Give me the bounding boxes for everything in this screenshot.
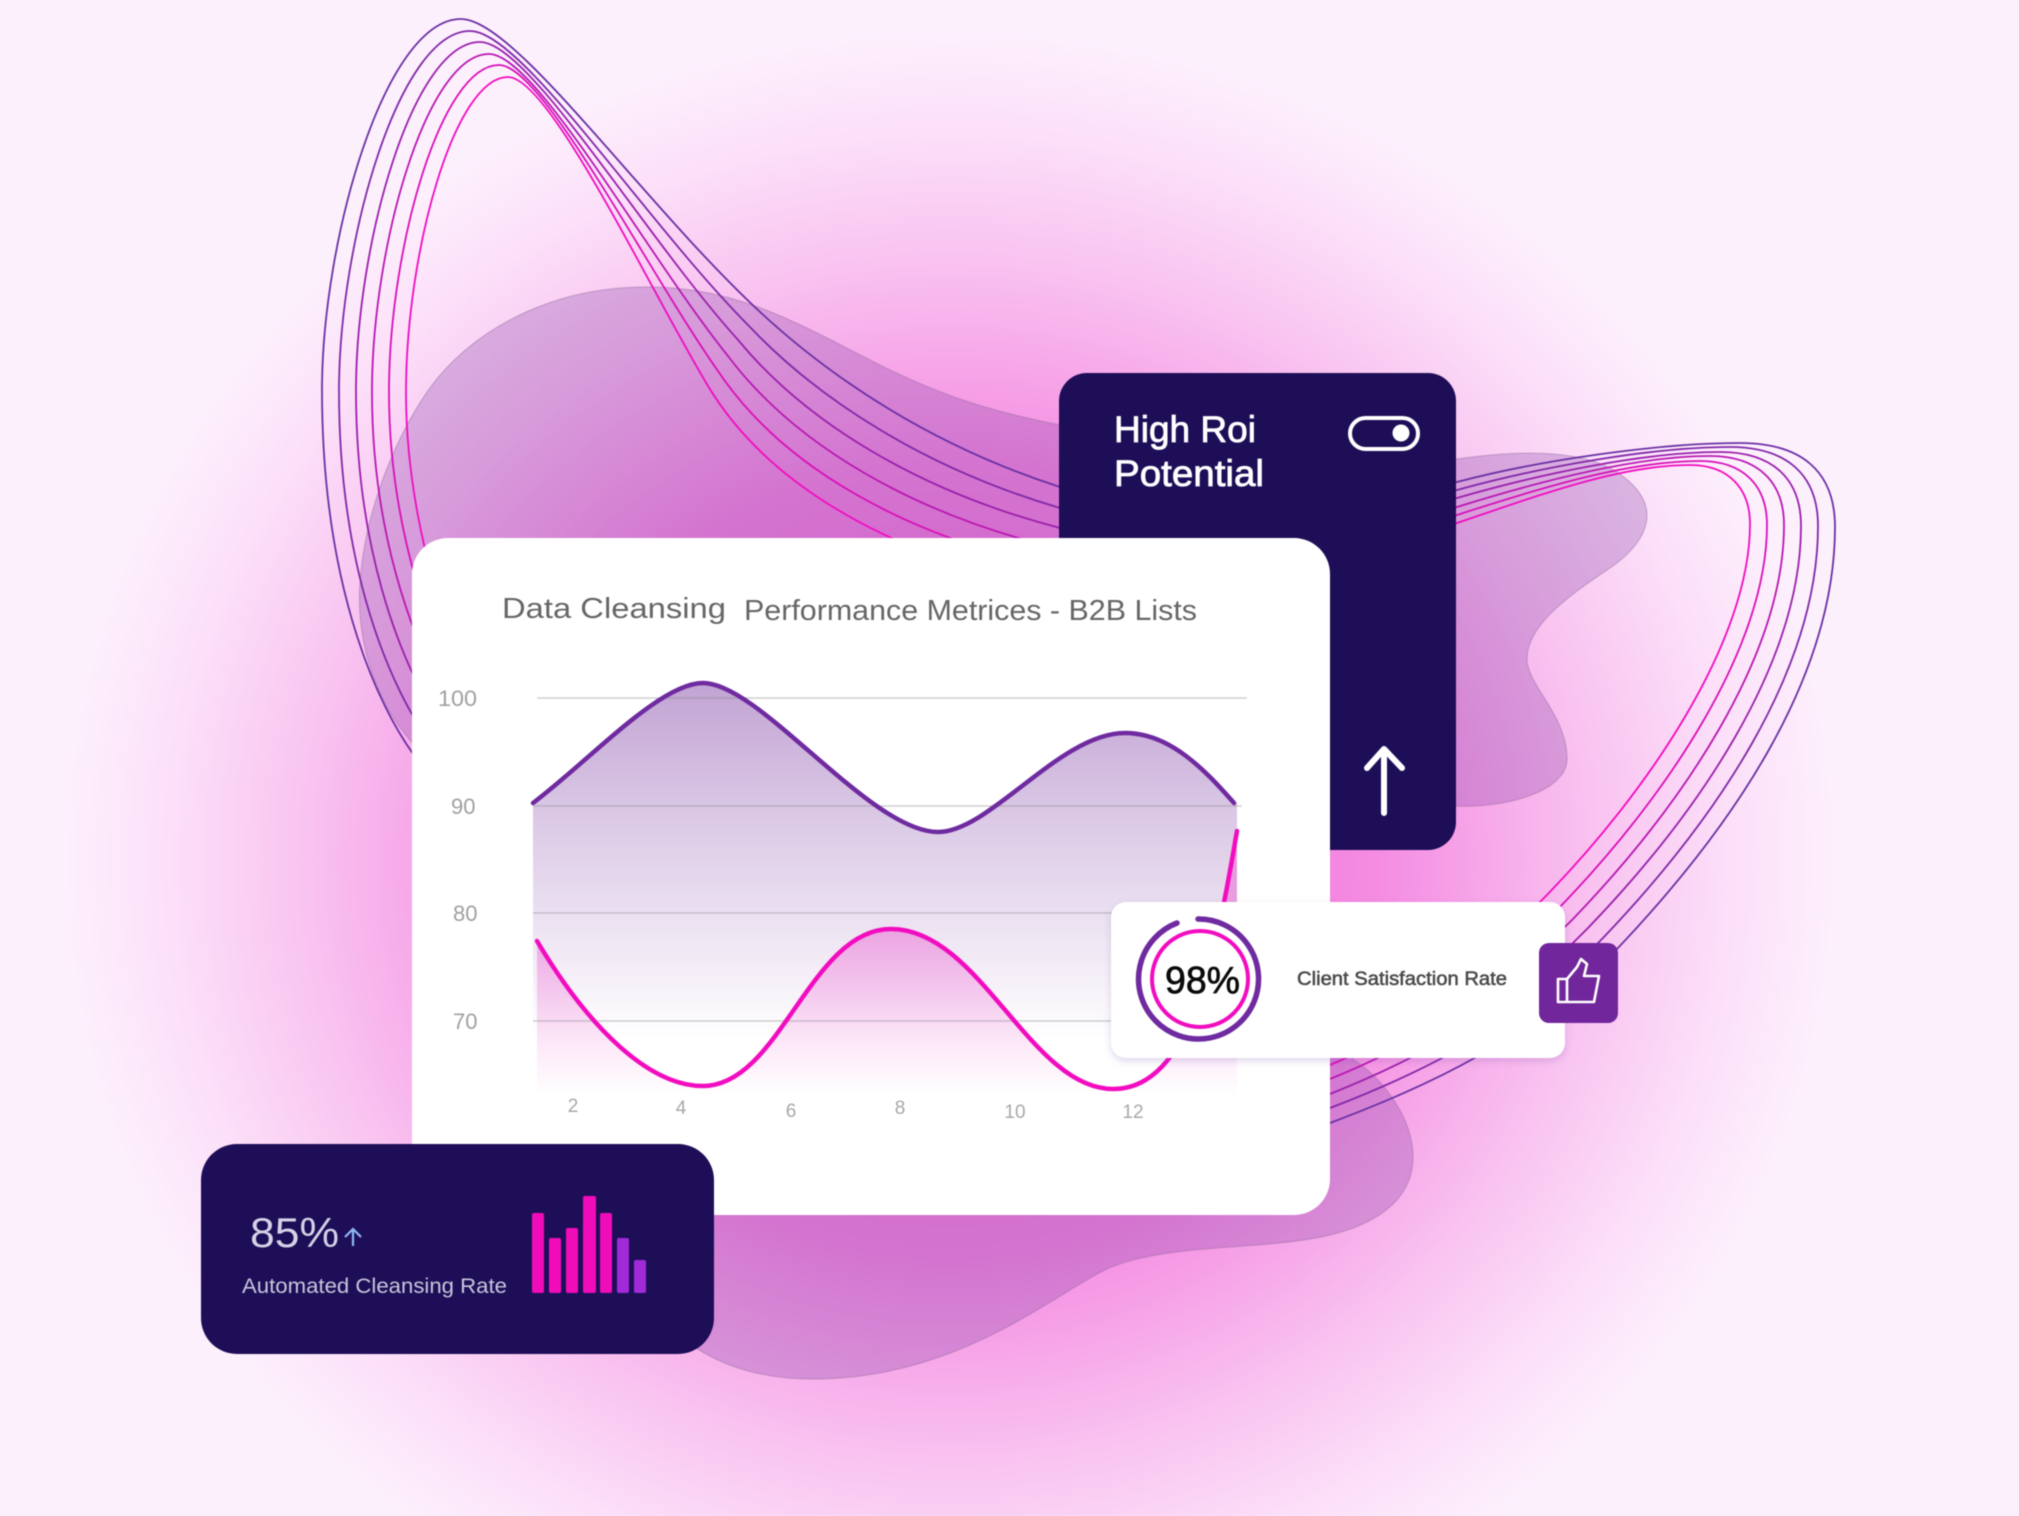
stat value: 85% — [250, 1209, 339, 1256]
x axis labels: 12 — [1122, 1102, 1144, 1123]
panel: performance chart card — [412, 538, 1330, 1215]
icon: up arrow — [1367, 749, 1402, 813]
y axis labels: 70 — [453, 1009, 477, 1034]
contour line bundle — [322, 19, 1835, 1123]
y axis labels: 90 — [451, 794, 475, 819]
chart title: Data Cleansing — [502, 593, 726, 625]
y axis labels: 100 — [438, 686, 477, 711]
y axis labels: 80 — [453, 901, 477, 926]
x axis labels: 8 — [895, 1098, 905, 1119]
purple area fill — [533, 683, 1237, 1040]
x axis labels: 6 — [786, 1101, 796, 1122]
x axis labels — [568, 1096, 1144, 1123]
icon: toggle switch — [1350, 418, 1418, 449]
x axis labels: 10 — [1004, 1102, 1026, 1123]
satisfaction label: Client Satisfaction Rate — [1297, 968, 1507, 990]
heading: high roi potential — [1114, 409, 1264, 494]
chart title: Performance Metrices - B2B Lists — [744, 595, 1197, 627]
icon: thumbs up — [1539, 943, 1618, 1023]
heading: high roi potential: High Roi — [1114, 409, 1256, 450]
stat label: Automated Cleansing Rate — [242, 1275, 507, 1298]
y axis labels — [438, 686, 477, 1034]
panel: automated cleansing rate — [201, 1144, 714, 1354]
x axis labels: 4 — [676, 1098, 687, 1119]
panel: high roi potential — [1059, 373, 1456, 850]
icon: small up arrow — [345, 1229, 361, 1246]
donut gauge — [1139, 919, 1259, 1039]
chart title — [502, 593, 1197, 627]
pink area fill — [537, 831, 1237, 1095]
x axis labels: 2 — [568, 1096, 578, 1117]
grid lines — [533, 698, 1247, 1021]
heading: high roi potential: Potential — [1114, 453, 1264, 494]
panel: client satisfaction — [1111, 902, 1618, 1058]
organic blob shape — [359, 287, 1647, 1379]
pink line series — [537, 831, 1237, 1089]
area chart — [438, 683, 1247, 1123]
purple line series — [533, 683, 1234, 832]
gauge value: 98% — [1165, 960, 1240, 1002]
mini bar chart — [532, 1196, 646, 1293]
